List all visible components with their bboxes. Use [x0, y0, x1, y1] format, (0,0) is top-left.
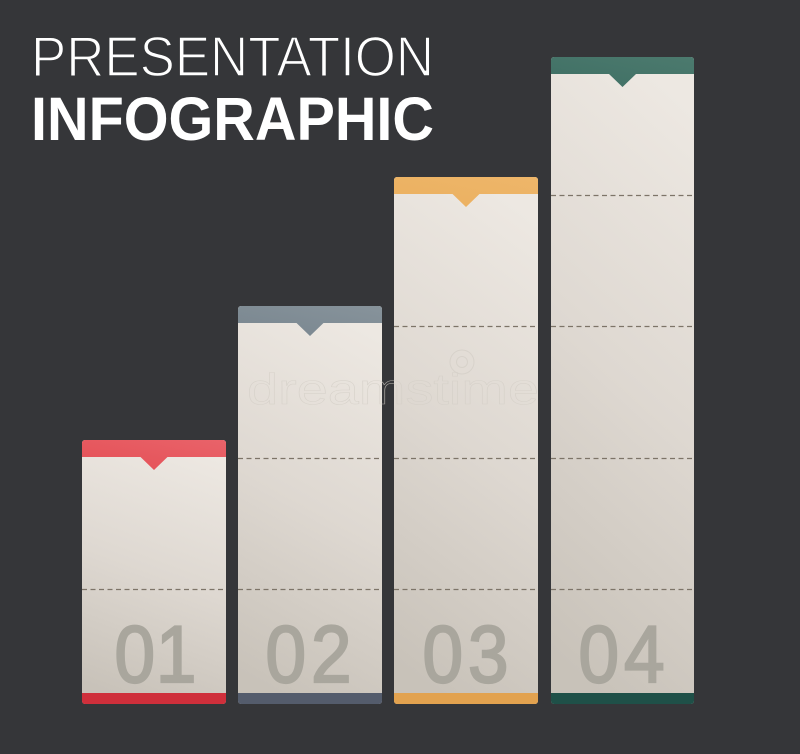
bar 01: 01 — [114, 609, 196, 700]
bar 03: 03 — [422, 609, 508, 700]
title — [31, 25, 434, 153]
watermark — [247, 350, 539, 414]
bar 04: 04 — [578, 609, 664, 700]
bar 01 — [82, 440, 226, 704]
bar 03 — [394, 177, 538, 704]
watermark: dreamstime — [247, 365, 539, 414]
bar 02: 02 — [266, 609, 351, 700]
title: PRESENTATION — [31, 25, 434, 89]
bar 02 — [238, 306, 382, 704]
bar 04 — [551, 57, 694, 704]
title: INFOGRAPHIC — [31, 85, 434, 153]
